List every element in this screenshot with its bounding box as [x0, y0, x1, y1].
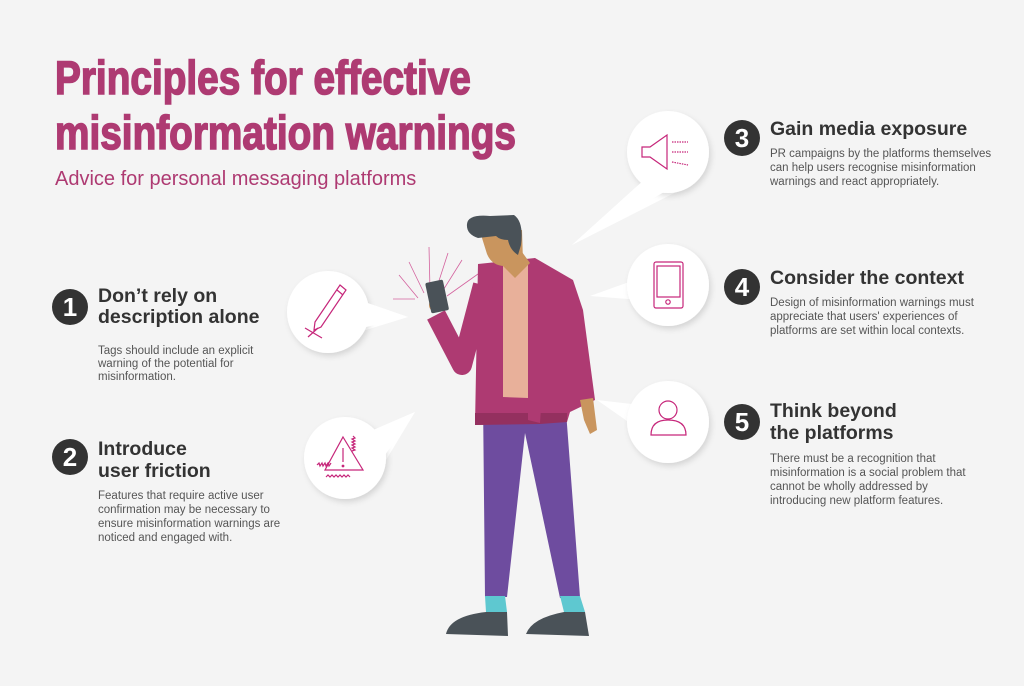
item 5: the platforms	[770, 422, 894, 444]
item 5: Think beyond	[770, 400, 897, 422]
socks	[485, 596, 585, 612]
title	[55, 53, 516, 160]
item 1: misinformation.	[98, 371, 176, 383]
jacket	[475, 258, 595, 425]
item 5: There must be a recognition that	[770, 453, 936, 465]
bubble 2: warning	[304, 412, 415, 499]
item 1: description alone	[98, 306, 260, 328]
bubble 3: megaphone	[572, 111, 709, 245]
title: misinformation warnings	[55, 108, 516, 160]
item 1: Don’t rely on	[98, 285, 217, 307]
icon: megaphone	[642, 135, 688, 169]
item 2: user friction	[98, 460, 211, 482]
item 3: PR campaigns by the platforms themselves	[770, 148, 991, 160]
icon: pencil	[305, 285, 346, 338]
item 2: ensure misinformation warnings are	[98, 518, 280, 530]
item 3: Gain media exposure	[770, 118, 967, 140]
item 4: platforms are set within local contexts.	[770, 325, 964, 337]
item 4: appreciate that users' experiences of	[770, 311, 958, 323]
item 4: Consider the context	[770, 267, 964, 289]
item 3	[724, 118, 991, 188]
icon: warning triangle	[317, 436, 363, 477]
item 4: 4	[735, 272, 750, 302]
item 2: Introduce	[98, 438, 187, 460]
item 2: noticed and engaged with.	[98, 532, 232, 544]
item 4	[724, 267, 975, 337]
shoes	[446, 612, 589, 636]
item 3: warnings and react appropriately.	[769, 176, 939, 188]
title: Principles for effective	[55, 53, 471, 105]
item 1: warning of the potential for	[97, 358, 234, 370]
item 1: 1	[63, 292, 77, 322]
item 5	[724, 400, 966, 507]
item 3: can help users recognise misinformation	[770, 162, 976, 174]
phone rays	[393, 247, 478, 299]
item 5: cannot be wholly addressed by	[770, 481, 928, 493]
item 5: misinformation is a social problem that	[770, 467, 966, 479]
hand left	[429, 298, 443, 312]
bubble 4: phone	[590, 244, 709, 326]
hand right	[580, 398, 597, 434]
item 3: 3	[735, 123, 749, 153]
neck and head	[500, 252, 530, 278]
item 5: introducing new platform features.	[770, 495, 943, 507]
item 2	[52, 438, 280, 544]
hair	[467, 215, 522, 255]
bubble 5: person	[597, 381, 709, 463]
item 1	[52, 285, 260, 383]
subtitle: Advice for personal messaging platforms	[55, 168, 416, 190]
icon: phone	[654, 262, 683, 308]
pants	[483, 398, 580, 598]
item 2: 2	[63, 442, 77, 472]
item 5: 5	[735, 407, 749, 437]
bubble 1: pencil	[287, 271, 408, 353]
phone	[425, 279, 449, 314]
item 2: Features that require active user	[98, 490, 264, 502]
icon: user	[651, 401, 686, 435]
arm	[436, 285, 483, 365]
item 2: confirmation may be necessary to	[98, 504, 270, 516]
person illustration	[393, 215, 597, 636]
item 1: Tags should include an explicit	[98, 345, 254, 357]
shirt	[503, 262, 528, 398]
item 4: Design of misinformation warnings must	[770, 297, 975, 309]
